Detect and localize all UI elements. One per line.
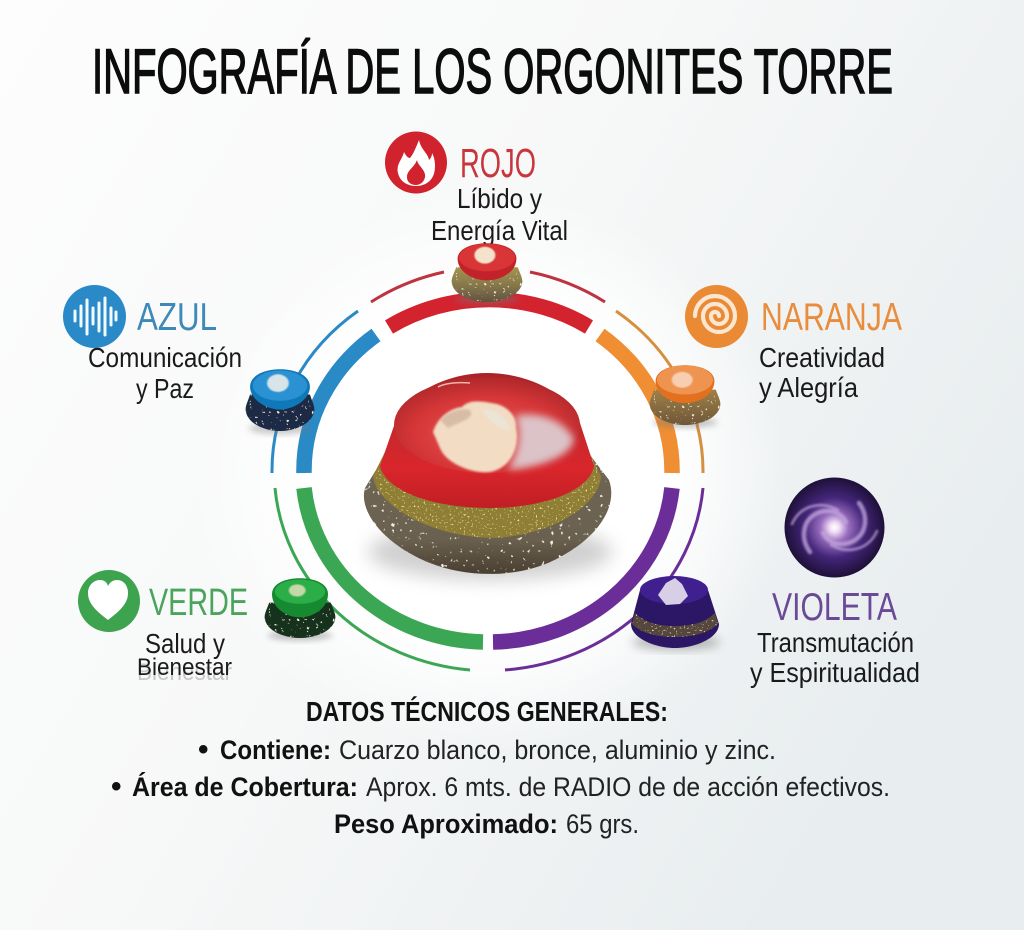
naranja heading: NARANJA [761, 296, 902, 339]
verde heading: VERDE [149, 582, 248, 624]
label: rojo [385, 132, 568, 246]
line: contents: Cuarzo blanco, bronce, aluminio y zinc. [339, 735, 776, 765]
highlight [438, 383, 470, 387]
orgonite: azul [246, 369, 314, 434]
thin ring segments [272, 272, 703, 670]
violeta description: y Espiritualidad [750, 657, 920, 688]
verde description: Salud y [145, 628, 225, 659]
line: coverage: • [111, 770, 122, 803]
rojo description [431, 183, 568, 246]
line: coverage: Aprox. 6 mts. de RADIO de de acción efectivos. [366, 772, 890, 802]
line: coverage [111, 770, 890, 803]
label: naranja [685, 285, 902, 403]
technical data [111, 696, 890, 839]
label: violeta [750, 586, 920, 688]
verde description: Bienestar [137, 654, 232, 681]
orgonite: naranja [650, 365, 720, 428]
quartz cloud [508, 415, 574, 470]
line: weight: 65 grs. [566, 809, 639, 839]
icon: sound wave [63, 285, 126, 348]
rojo heading: ROJO [460, 140, 536, 186]
orgonite: rojo [452, 243, 522, 305]
azul heading: AZUL [137, 296, 217, 339]
thick ring segments [304, 300, 672, 642]
icon: flame [385, 132, 447, 194]
azul description: y Paz [136, 373, 194, 404]
violeta description [750, 627, 920, 688]
icon: violet galaxy [784, 478, 884, 578]
icon: heart [78, 570, 140, 632]
central red orgonite [364, 373, 612, 580]
line: contents [198, 733, 776, 766]
violeta heading: VIOLETA [772, 586, 897, 629]
ring diagram [272, 272, 703, 670]
quartz crystal [433, 401, 517, 472]
verde description: Bienestar [137, 659, 232, 686]
technical heading: DATOS TÉCNICOS GENERALES: [306, 696, 668, 727]
orgonite: violeta [631, 576, 720, 650]
label: azul [63, 285, 242, 404]
azul description [88, 342, 242, 404]
violeta description: Transmutación [757, 627, 914, 658]
orgonite: verde [265, 578, 335, 641]
naranja description: Creatividad [759, 342, 885, 373]
naranja description [759, 342, 885, 403]
line: weight: Peso Aproximado: [334, 809, 558, 839]
label: verde [78, 570, 248, 686]
line: coverage: Área de Cobertura: [132, 771, 358, 802]
line: contents: • [198, 733, 209, 766]
naranja description: y Alegría [759, 372, 858, 403]
rojo description: Energía Vital [431, 215, 568, 246]
rojo description: Líbido y [457, 183, 542, 214]
verde description [137, 628, 232, 686]
line: contents: Contiene: [220, 735, 331, 765]
icon: spiral [685, 285, 748, 348]
azul description: Comunicación [88, 342, 242, 373]
